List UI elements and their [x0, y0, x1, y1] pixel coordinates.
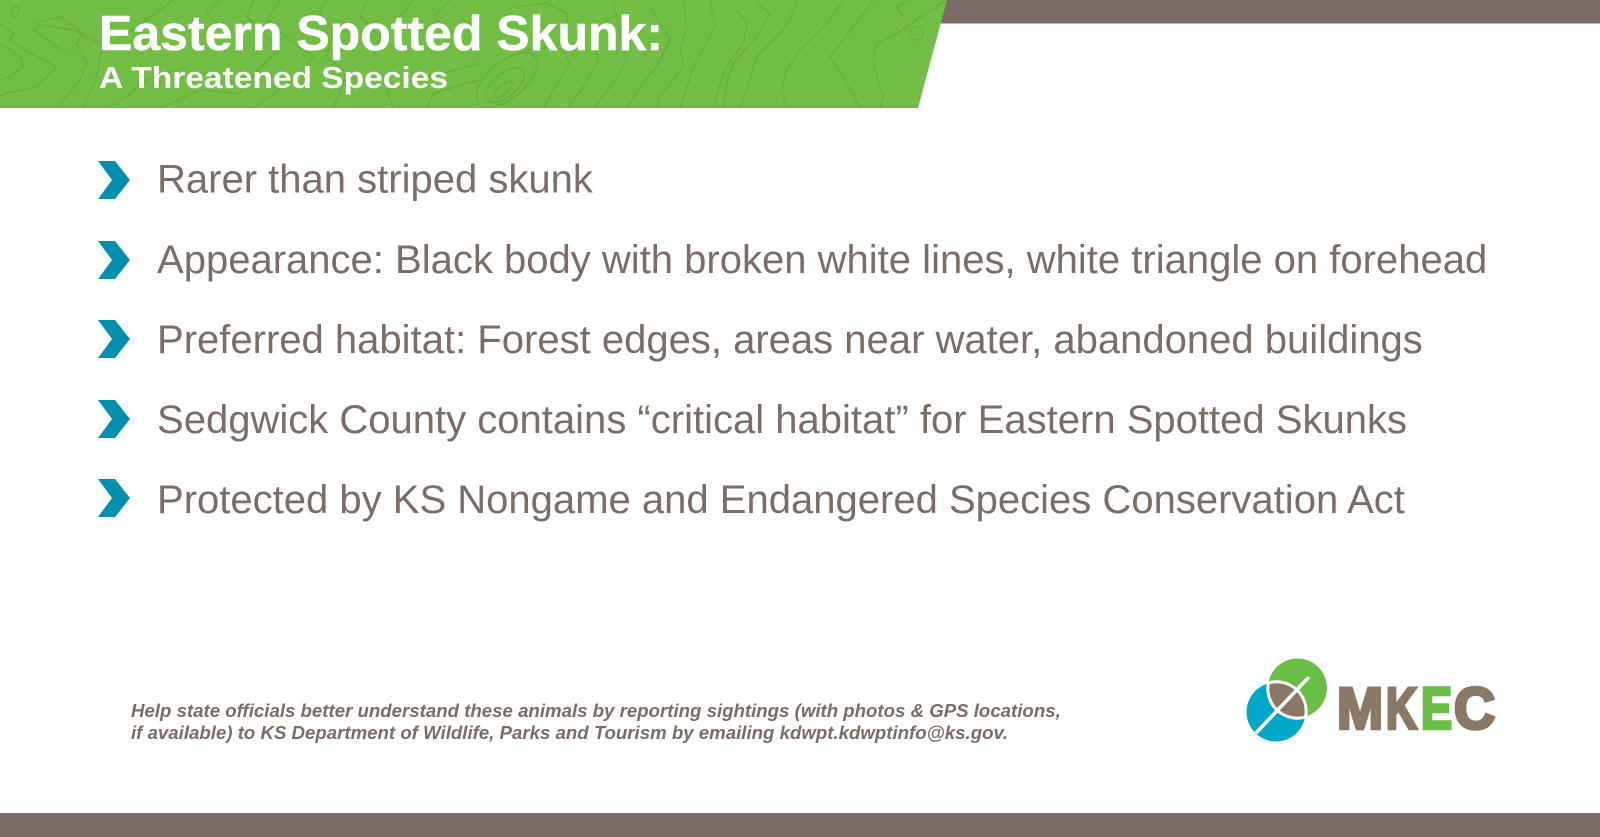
MKEC logo: C: [1454, 676, 1495, 742]
subtitle: A Threatened Species: [99, 60, 448, 95]
MKEC logo: K: [1386, 676, 1417, 742]
top grey bar: [940, 0, 1600, 24]
bottom grey bar: [0, 813, 1600, 837]
footer note: [131, 700, 1061, 743]
title: Eastern Spotted Skunk:: [99, 7, 663, 61]
header banner: [0, 0, 947, 118]
bullet 4: Sedgwick County contains “critical habitat” for Eastern Spotted Skunks: [157, 398, 1407, 442]
bullet 5: Protected by KS Nongame and Endangered Species Conservation Act: [157, 478, 1405, 522]
footer note: if available) to KS Department of Wildlife, Parks and Tourism by emailing kdwpt.kdwptinfo@ks.gov.: [131, 722, 1008, 743]
footer note: Help state officials better understand these animals by reporting sightings (with photos & GPS locations,: [131, 700, 1061, 721]
MKEC logo: E: [1421, 676, 1452, 742]
bullet 1: Rarer than striped skunk: [157, 158, 594, 202]
bullet 3: Preferred habitat: Forest edges, areas near water, abandoned buildings: [157, 318, 1423, 362]
MKEC logo: M: [1337, 676, 1383, 742]
MKEC logo: [1246, 658, 1495, 742]
bullet 2: Appearance: Black body with broken white lines, white triangle on forehead: [157, 238, 1487, 282]
